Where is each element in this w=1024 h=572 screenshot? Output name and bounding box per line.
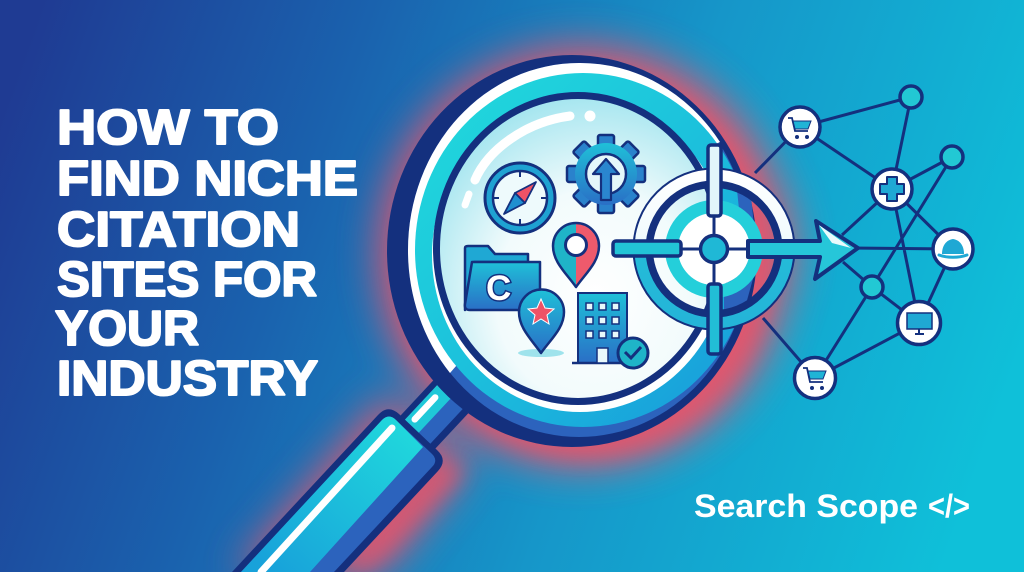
title xyxy=(55,101,358,406)
tight glow behind magnifier xyxy=(345,68,772,572)
icon: location pin xyxy=(553,223,599,287)
network nodes xyxy=(780,86,973,398)
brand label: </> xyxy=(928,488,970,524)
lens glare xyxy=(465,110,596,205)
arrow xyxy=(748,221,858,279)
title: SITES FOR xyxy=(57,253,317,307)
title: FIND NICHE xyxy=(57,152,358,206)
handle collar xyxy=(385,381,468,464)
icon: office building xyxy=(572,293,634,363)
icon: folder xyxy=(465,246,540,310)
crosshair center xyxy=(700,236,728,262)
node: shopping cart top xyxy=(780,107,820,147)
node: shopping cart bottom xyxy=(794,358,836,398)
node: teal dot top xyxy=(900,86,922,108)
handle grip xyxy=(232,409,443,572)
magnifying glass xyxy=(232,55,757,572)
brand label: Search Scope xyxy=(694,488,918,524)
target rings xyxy=(640,175,788,323)
title: INDUSTRY xyxy=(57,352,318,406)
node: monitor xyxy=(898,302,940,344)
wide glow behind magnifier xyxy=(235,44,795,572)
node: hard hat xyxy=(933,229,973,269)
node: teal dot lower xyxy=(861,276,883,298)
icon: folder: C xyxy=(486,269,511,308)
target crosshair xyxy=(613,145,858,354)
crosshair left bar xyxy=(613,241,681,256)
node: medical plus xyxy=(872,169,912,209)
icon: pin shadow xyxy=(518,349,564,357)
crosshair lines xyxy=(682,217,748,283)
icon: star pin xyxy=(519,290,564,353)
icon: compass xyxy=(485,163,555,233)
icon: check badge xyxy=(618,338,648,368)
lens glass xyxy=(436,96,720,402)
crosshair top bar xyxy=(708,145,721,216)
network connector lines xyxy=(755,97,953,378)
title: CITATION xyxy=(57,203,300,257)
title: YOUR xyxy=(55,302,199,356)
crosshair bottom bar xyxy=(708,284,721,354)
icon: gear with arrow xyxy=(567,135,645,213)
lens rim xyxy=(387,55,757,447)
node: teal dot right xyxy=(941,146,963,168)
title: HOW TO xyxy=(57,101,279,155)
